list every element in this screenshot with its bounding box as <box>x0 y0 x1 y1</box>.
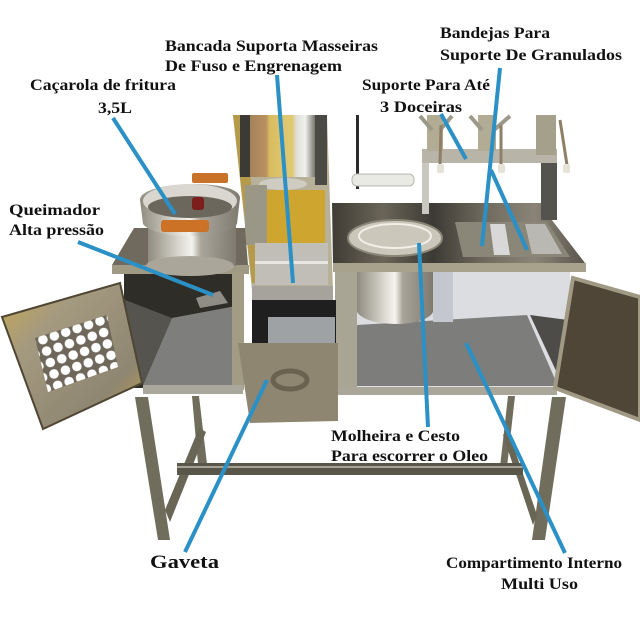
oil pot <box>357 272 433 324</box>
label: Caçarola <box>30 77 176 117</box>
drawer front with ring handle <box>238 343 338 423</box>
arrow: bench <box>277 75 293 283</box>
label: Bancada: Bancada Suporta Masseiras <box>165 38 378 55</box>
icon: burner <box>196 291 228 308</box>
dispenser support <box>420 115 570 220</box>
left door with honeycomb grid <box>2 283 142 429</box>
right door <box>555 278 640 420</box>
arrow: tray 1 <box>482 68 500 246</box>
left cabinet <box>112 228 249 394</box>
arrow: fry pan <box>113 118 175 214</box>
label: Bandejas: Suporte De Granulados <box>440 47 622 64</box>
blue pointer lines <box>78 68 565 553</box>
label: Molheira: Para escorrer o Oleo <box>331 448 488 465</box>
frying pan with handles <box>140 173 240 276</box>
granule trays <box>455 222 570 257</box>
label: Molheira: Molheira e Cesto <box>331 428 460 445</box>
right worktop <box>332 203 586 272</box>
arrow: drawer <box>185 380 267 552</box>
label: Caçarola: 3,5L <box>98 100 132 117</box>
arrow: oil pot <box>419 243 428 427</box>
fry basket <box>348 220 442 256</box>
label: Suporte doceiras: 3 Doceiras <box>380 99 462 116</box>
arrow: compartment <box>466 343 565 553</box>
label: Queimador: Queimador <box>9 202 100 219</box>
drawer area <box>252 300 336 344</box>
arrow: tray 2 <box>491 170 527 250</box>
label: Queimador: Alta pressão <box>9 222 104 239</box>
label: Bandejas <box>440 25 622 64</box>
label: Bancada <box>165 38 378 75</box>
label: Bancada: De Fuso e Engrenagem <box>165 58 343 75</box>
central column with cylinder <box>233 115 333 300</box>
label: Compartimento <box>446 555 622 593</box>
table legs and crossbar <box>135 396 566 540</box>
label: Compartimento: Multi Uso <box>501 576 578 593</box>
arrow: burner <box>78 242 213 295</box>
arrow: doceiras support <box>441 114 466 159</box>
label: Suporte doceiras: Suporte Para Até <box>362 77 490 94</box>
right cabinet <box>335 272 570 395</box>
label: Bandejas: Bandejas Para <box>440 25 550 42</box>
roller handle <box>352 115 414 189</box>
label: Gaveta: Gaveta <box>150 552 220 573</box>
label: Queimador <box>9 202 104 239</box>
label: Molheira <box>331 428 488 465</box>
label: Suporte doceiras <box>362 77 490 116</box>
label: Caçarola: Caçarola de fritura <box>30 77 176 94</box>
label: Compartimento: Compartimento Interno <box>446 555 622 572</box>
